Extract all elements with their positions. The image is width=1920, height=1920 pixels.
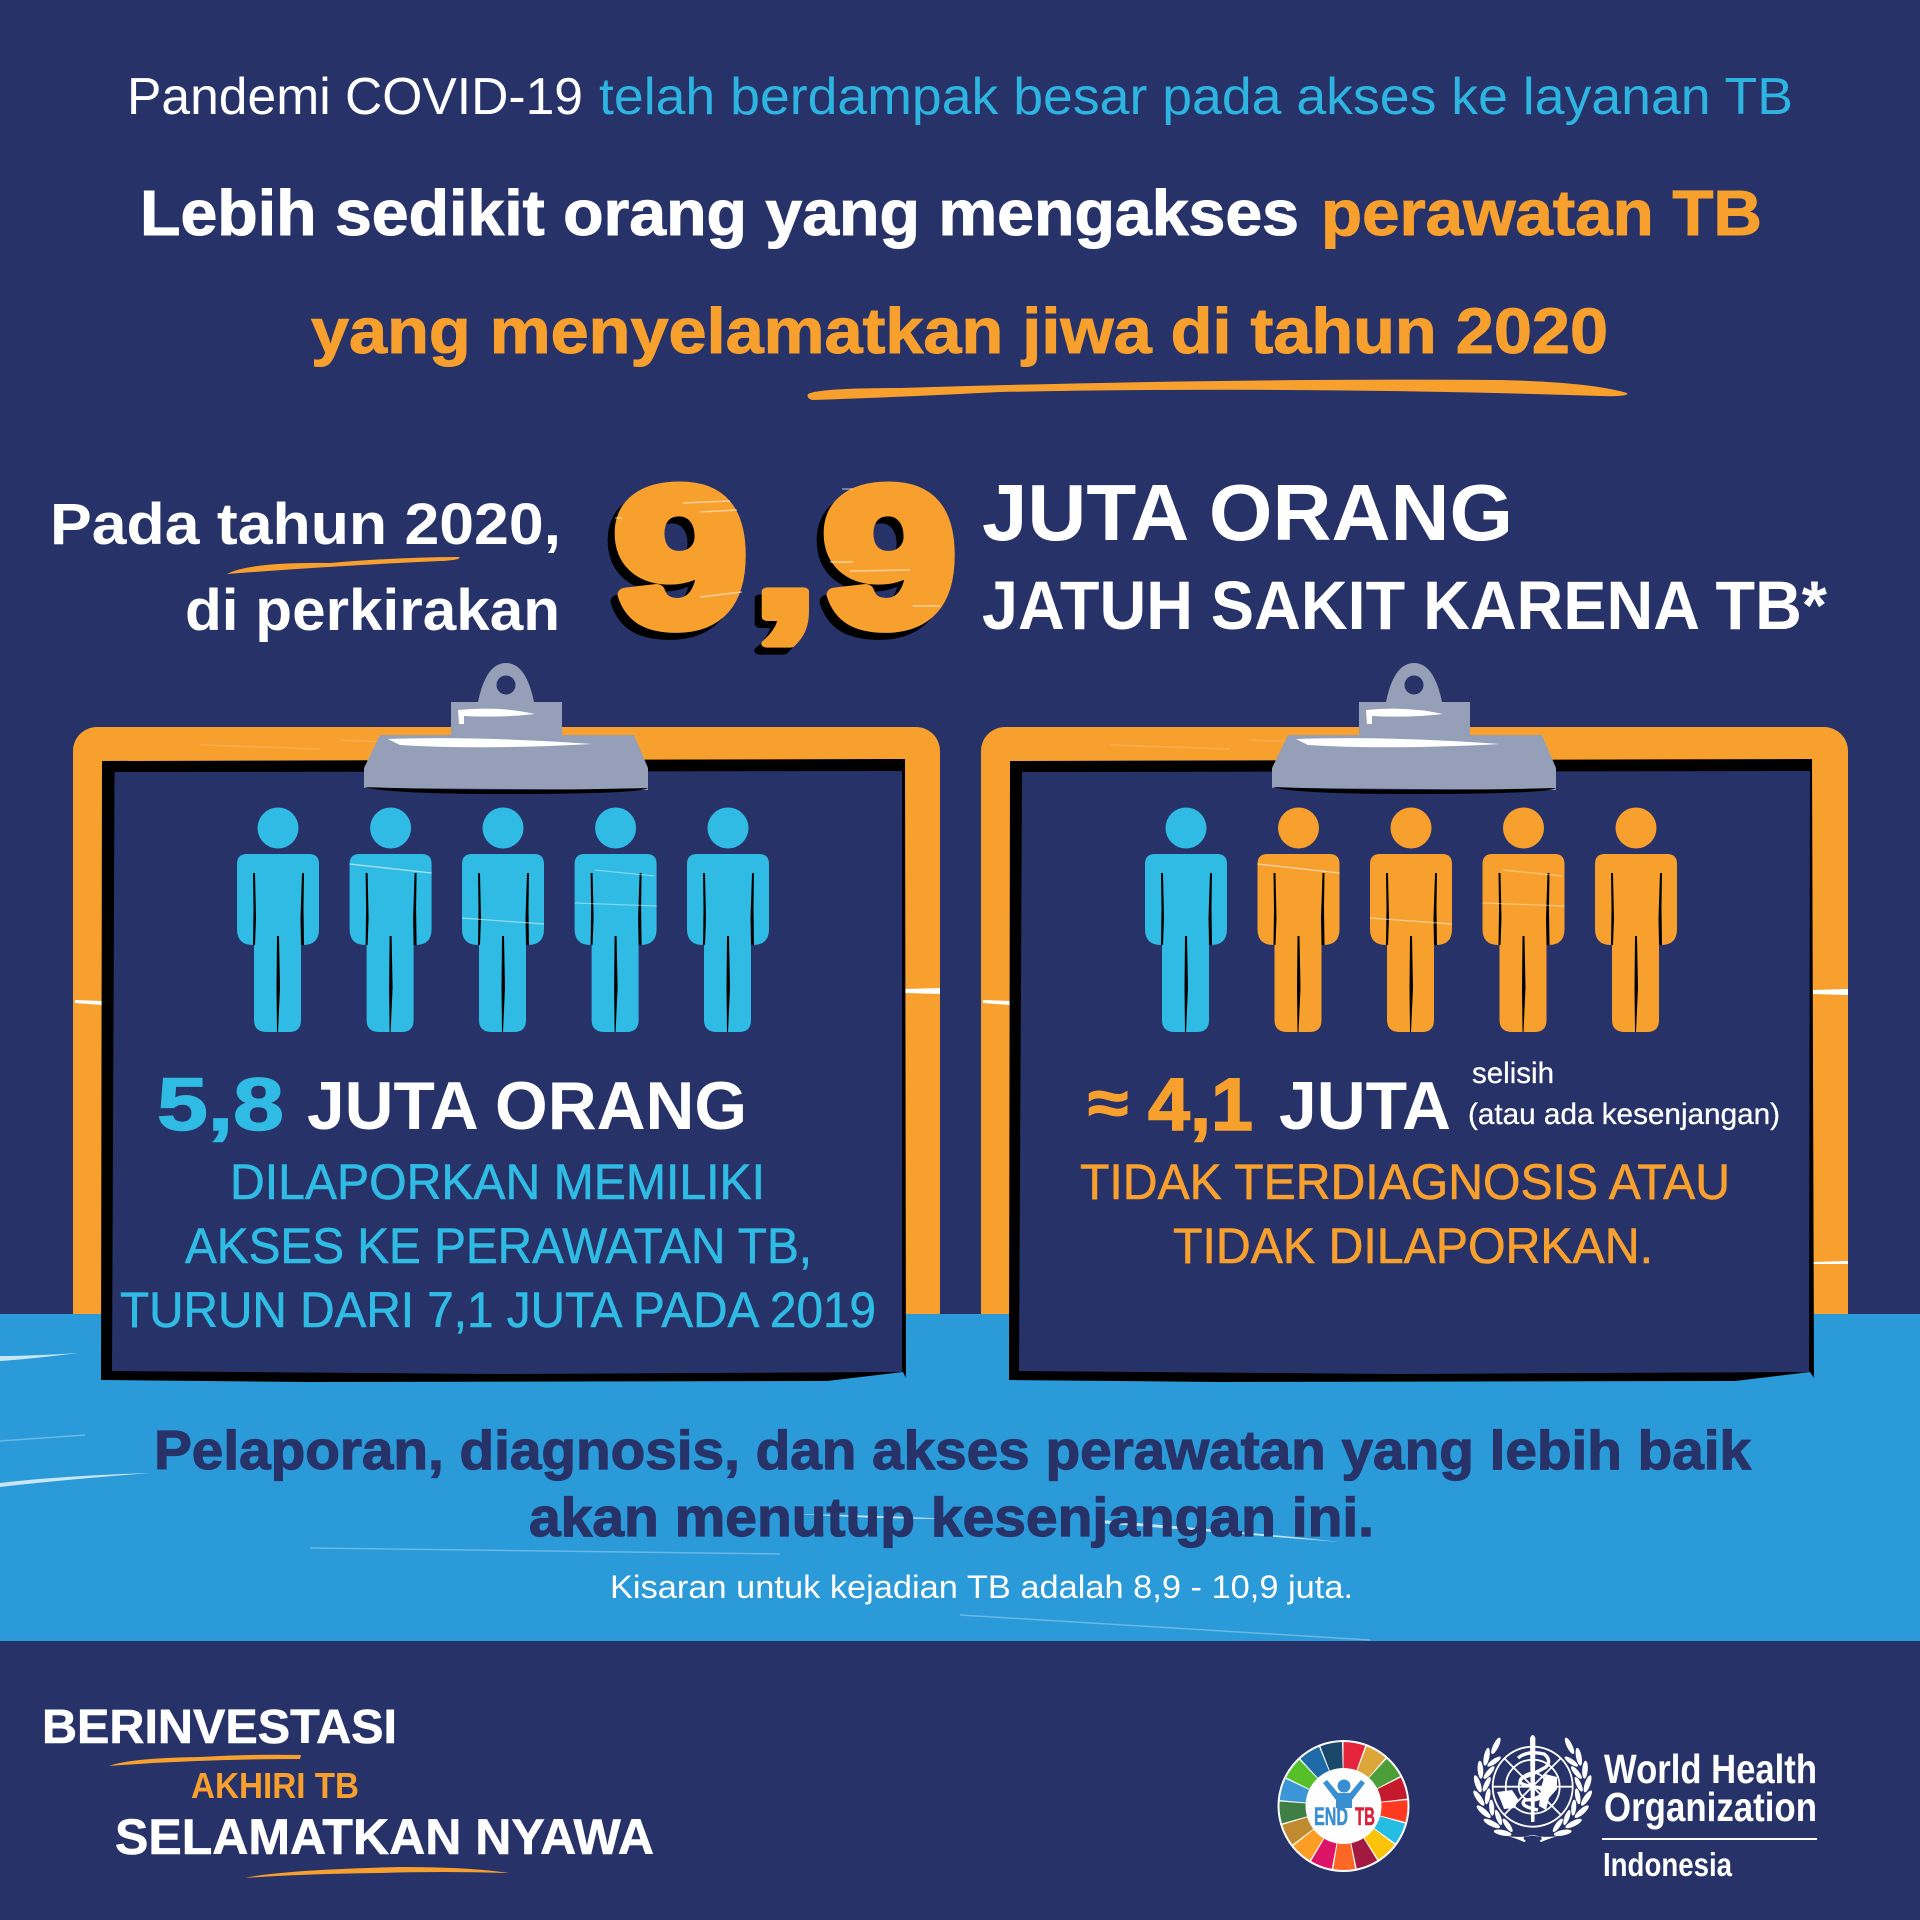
water band xyxy=(0,1314,1920,1641)
title block xyxy=(127,68,1793,400)
right statistic description: TIDAK TERDIAGNOSIS ATAU xyxy=(1080,1154,1730,1210)
big number 9,9: 9 xyxy=(824,449,955,666)
laurel left xyxy=(1472,1736,1536,1842)
End TB wordmark: END xyxy=(1314,1803,1348,1831)
closing message: akan menutup kesenjangan ini. xyxy=(529,1486,1374,1548)
person orange 1 xyxy=(1258,808,1340,1032)
End TB wordmark: TB xyxy=(1355,1803,1375,1831)
person 4 xyxy=(575,808,657,1032)
slogan xyxy=(42,1701,654,1878)
headline underline xyxy=(808,380,1627,400)
right statistic heading: JUTA xyxy=(1279,1068,1451,1144)
gap note: (atau ada kesenjangan) xyxy=(1468,1098,1780,1131)
person 1 xyxy=(237,808,319,1032)
icon: raised arms person xyxy=(1323,1780,1365,1808)
right statistic description: TIDAK DILAPORKAN. xyxy=(1173,1218,1653,1274)
lead-in text xyxy=(50,492,561,643)
headline line two: yang menyelamatkan jiwa di tahun 2020 xyxy=(311,295,1608,367)
person orange 3 xyxy=(1482,808,1564,1032)
headline line one xyxy=(140,177,1762,249)
big number 9,9: , xyxy=(750,462,820,654)
WHO wordmark: Indonesia xyxy=(1603,1846,1733,1883)
panel: left clipboard sheet xyxy=(101,663,906,1382)
slogan: AKHIRI TB xyxy=(191,1765,359,1806)
headline line one: Lebih sedikit orang yang mengakses xyxy=(140,177,1299,249)
left statistic description: TURUN DARI 7,1 JUTA PADA 2019 xyxy=(120,1282,876,1338)
slogan underline one xyxy=(109,1755,301,1766)
headline line one: perawatan TB xyxy=(1321,177,1762,249)
right statistic heading: 4,1 xyxy=(1148,1063,1253,1146)
slogan: SELAMATKAN NYAWA xyxy=(115,1809,654,1865)
people row: five blue figures xyxy=(237,808,769,1032)
lead-in text: Pada tahun 2020, xyxy=(50,492,561,557)
big number 9,9: 9 xyxy=(608,456,739,673)
lead-in underline xyxy=(227,557,459,574)
person 5 xyxy=(687,808,769,1032)
left statistic description xyxy=(120,1154,876,1338)
person blue xyxy=(1145,808,1227,1032)
WHO wordmark: World Health xyxy=(1604,1746,1817,1792)
right statistic description xyxy=(1080,1154,1730,1274)
panel: clipboard left back xyxy=(73,727,940,1367)
slogan: BERINVESTASI xyxy=(42,1701,397,1754)
right statistic heading xyxy=(1088,1063,1451,1146)
gap note xyxy=(1468,1057,1780,1131)
person orange 2 xyxy=(1370,808,1452,1032)
laurel right xyxy=(1529,1736,1594,1842)
right statistic heading: ≈ xyxy=(1088,1069,1128,1138)
figure caption: JUTA ORANG xyxy=(982,468,1513,557)
big number 9,9: 9 xyxy=(817,456,948,673)
gap note: selisih xyxy=(1472,1057,1554,1090)
WHO wordmark: Organization xyxy=(1604,1784,1817,1830)
people row: one blue and four orange figures xyxy=(1145,808,1677,1032)
key figure row xyxy=(50,449,1827,673)
icon: WHO emblem xyxy=(1472,1735,1594,1842)
slogan underline two xyxy=(245,1867,509,1878)
footnote: Kisaran untuk kejadian TB adalah 8,9 - 10,9 juta. xyxy=(610,1569,1353,1605)
intro line: Pandemi COVID-19 xyxy=(127,68,583,126)
panel: clipboard right back xyxy=(981,727,1848,1367)
closing message xyxy=(154,1419,1751,1548)
logo: World Health Organization xyxy=(1472,1735,1817,1883)
panel: right clipboard sheet xyxy=(1009,663,1814,1382)
left statistic description: AKSES KE PERAWATAN TB, xyxy=(185,1218,812,1274)
clip: right xyxy=(1272,663,1556,794)
WHO wordmark xyxy=(1602,1746,1817,1883)
logo: End TB xyxy=(1271,1734,1416,1878)
big number 9,9: , xyxy=(743,469,813,661)
person 2 xyxy=(350,808,432,1032)
intro line: telah berdampak besar pada akses ke layanan TB xyxy=(599,68,1793,126)
figure caption: JATUH SAKIT KARENA TB* xyxy=(982,567,1827,644)
left statistic heading: JUTA ORANG xyxy=(307,1068,747,1144)
figure caption xyxy=(982,468,1827,644)
big number 9,9: 9 xyxy=(615,449,746,666)
left statistic heading xyxy=(157,1063,747,1146)
left statistic description: DILAPORKAN MEMILIKI xyxy=(230,1154,765,1210)
intro line xyxy=(127,68,1793,126)
lead-in text: di perkirakan xyxy=(185,578,560,643)
clip: left xyxy=(364,663,648,794)
person 3 xyxy=(462,808,544,1032)
person orange 4 xyxy=(1595,808,1677,1032)
left statistic heading: 5,8 xyxy=(157,1063,284,1146)
big number 9,9 xyxy=(608,449,955,673)
closing message: Pelaporan, diagnosis, dan akses perawatan yang lebih baik xyxy=(154,1419,1751,1481)
